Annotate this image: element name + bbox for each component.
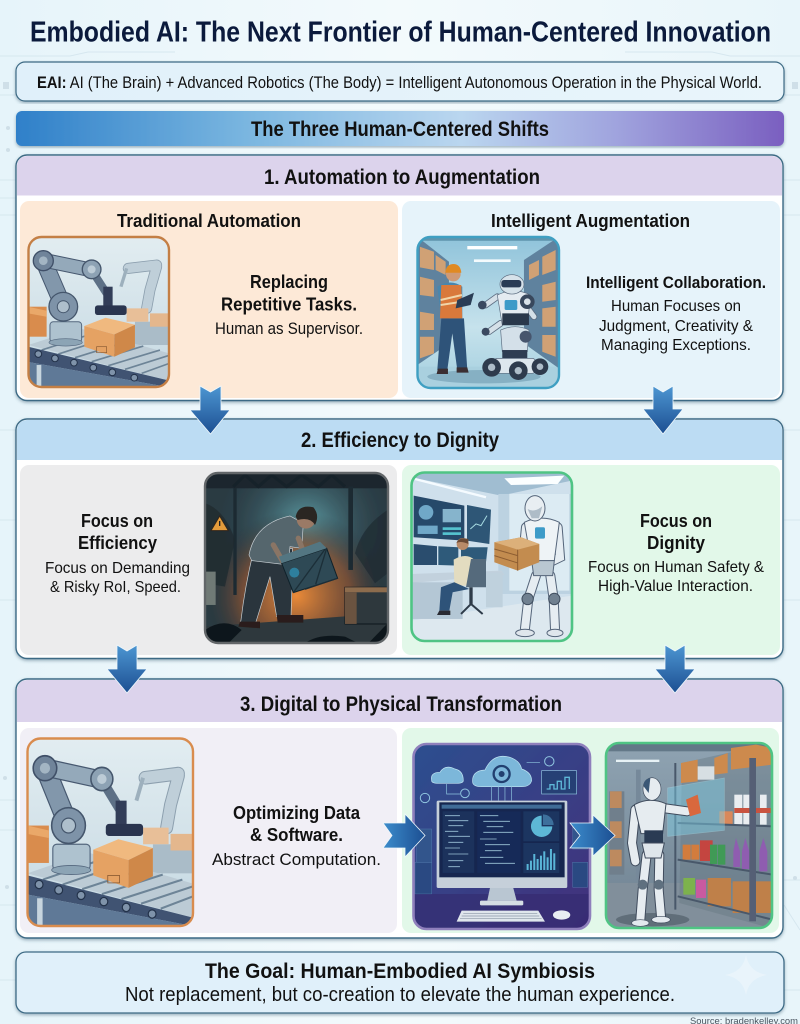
illustration: worker lifting crate in hazard: [205, 473, 388, 643]
text: focus on dignity: High-Value Interaction.: [598, 578, 753, 595]
text: replacing repetitive tasks: Human as Supervisor.: [215, 320, 363, 338]
illustration: worker and robot in warehouse: [417, 237, 559, 388]
illustration: robot arm on conveyor: [27, 738, 193, 926]
text: intelligent collaboration: [586, 273, 766, 354]
sub-panel: focus on efficiency: [20, 465, 397, 655]
arrow: down from panel 2 right: [655, 645, 695, 693]
text: optimizing data and software: Optimizing Data: [233, 803, 361, 823]
panel header 2: 2. Efficiency to Dignity: [301, 429, 499, 452]
illustration: robot carrying crate, human at console: [411, 472, 572, 641]
sub-panel: traditional automation: Traditional Automation: [117, 210, 301, 231]
text: intelligent collaboration: Judgment, Creativity &: [599, 318, 753, 335]
panel header 2: [17, 420, 782, 460]
text: focus on efficiency: Efficiency: [78, 533, 157, 553]
panel: automation to augmentation: [16, 155, 783, 400]
text: optimizing data and software: [212, 803, 381, 869]
goal box: [16, 952, 784, 1013]
arrow: text to digital screen: [383, 814, 425, 857]
text: focus on dignity: Focus on Human Safety &: [588, 559, 764, 576]
text: replacing repetitive tasks: Replacing: [250, 272, 328, 292]
sub-panel: focus on dignity: [402, 465, 780, 655]
text: replacing repetitive tasks: [215, 272, 363, 338]
text: focus on dignity: Dignity: [647, 533, 705, 553]
panel header 3: [17, 680, 782, 722]
icon: sparkle: [725, 955, 767, 995]
panel: digital to physical transformation: [16, 679, 783, 938]
text: optimizing data and software: & Software.: [250, 825, 343, 845]
sub-panel: intelligent augmentation: [402, 201, 780, 398]
goal box: Not replacement, but co-creation to elevate the human experience.: [125, 984, 675, 1006]
sub-panel: physical: [402, 728, 779, 933]
sub-panel: digital: [20, 728, 397, 933]
section banner: The Three Human-Centered Shifts: [251, 118, 549, 141]
text: focus on dignity: [588, 511, 764, 595]
text: focus on efficiency: Focus on: [81, 511, 153, 531]
text: focus on dignity: Focus on: [640, 511, 712, 531]
panel header 1: [17, 156, 782, 196]
goal box: The Goal: Human-Embodied AI Symbiosis: [205, 959, 595, 983]
text: optimizing data and software: Abstract Computation.: [212, 850, 381, 869]
arrow: down from panel 1 left: [190, 386, 230, 434]
definition box: [16, 62, 784, 101]
panel header 1: 1. Automation to Augmentation: [264, 166, 540, 189]
text: intelligent collaboration: Human Focuses on: [611, 298, 741, 315]
arrow: down from panel 1 right: [643, 386, 683, 434]
section banner: [16, 111, 784, 146]
text: focus on efficiency: & Risky RoI, Speed.: [50, 579, 181, 596]
illustration: robot picking product from shelf: [606, 743, 773, 929]
illustration: cloud computing screen: [413, 744, 590, 929]
text: focus on efficiency: [45, 511, 190, 596]
text: intelligent collaboration: Managing Exceptions.: [601, 337, 751, 354]
arrow: digital screen to physical robot: [570, 815, 615, 856]
text: replacing repetitive tasks: Repetitive Tasks.: [221, 294, 357, 314]
text: intelligent collaboration: Intelligent Collaboration.: [586, 273, 766, 292]
panel header 3: 3. Digital to Physical Transformation: [240, 693, 562, 716]
arrow: down from panel 2 left: [107, 645, 147, 693]
illustration: robot arm on conveyor: [28, 237, 169, 387]
sub-panel: traditional automation: [20, 201, 398, 398]
text: focus on efficiency: Focus on Demanding: [45, 560, 190, 577]
sub-panel: intelligent augmentation: Intelligent Augmentation: [491, 210, 690, 231]
panel: efficiency to dignity: [16, 419, 783, 658]
